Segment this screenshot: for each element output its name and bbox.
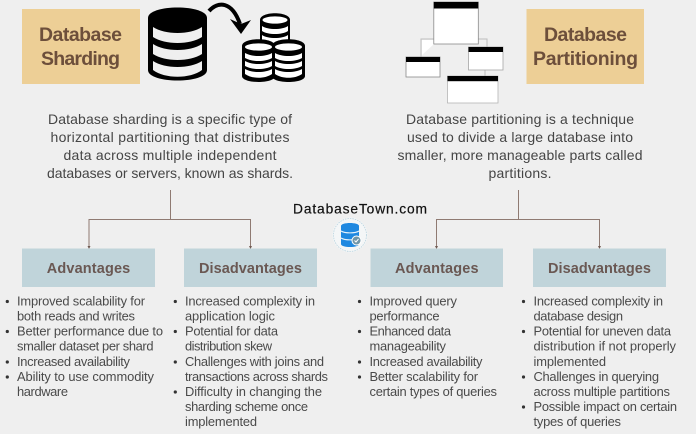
list: sharding disadvantages: [174, 294, 328, 429]
list: partitioning advantages: performance: [370, 308, 440, 324]
list: sharding advantages: both reads and writes: [17, 308, 135, 324]
heading: disadvantages: Disadvantages: [548, 261, 651, 277]
panel: partitioning disadvantages: [522, 248, 677, 429]
list: partitioning advantages: Better scalability for: [370, 369, 479, 384]
list: partitioning disadvantages: [522, 294, 677, 429]
text: sharding description: data across multiple independent: [64, 147, 277, 163]
brand: DatabaseTown.com: DatabaseTown.com: [293, 202, 427, 216]
text: partitioning description: Database partitioning is a technique: [406, 111, 634, 127]
list: sharding advantages: Better performance due to: [17, 324, 163, 338]
list: sharding disadvantages: Potential for data: [185, 324, 279, 338]
list: sharding advantages: [6, 294, 163, 399]
heading: advantages: Advantages: [47, 261, 130, 277]
heading: Database Sharding: [22, 9, 140, 84]
list: partitioning advantages: Enhanced data: [370, 324, 452, 338]
list: sharding disadvantages: Increased complexity in: [185, 294, 315, 308]
text: sharding description: [47, 111, 293, 181]
list: sharding disadvantages: implemented: [185, 414, 257, 429]
icon: brand database badge: [332, 218, 368, 252]
heading: advantages: [22, 248, 155, 287]
icon: partition windows: [406, 2, 503, 103]
text: sharding description: databases or servers, known as shards.: [47, 165, 293, 181]
text: partitioning description: smaller, more manageable parts called: [398, 147, 642, 163]
list: partitioning disadvantages: Possible impact on certain: [534, 399, 677, 414]
list: partitioning disadvantages: implemented: [534, 354, 606, 369]
heading: advantages: [370, 248, 503, 287]
list: sharding advantages: Ability to use commodity: [17, 369, 155, 384]
heading: Database Partitioning: Partitioning: [533, 48, 638, 70]
list: partitioning disadvantages: Challenges in querying: [534, 369, 659, 384]
list: sharding disadvantages: distribution skew: [185, 338, 273, 354]
text: sharding description: Database sharding is a specific type of: [48, 111, 292, 127]
text: sharding description: horizontal partitioning that distributes: [50, 129, 290, 145]
heading: Database Partitioning: [526, 9, 644, 84]
heading: Database Partitioning: Database: [544, 24, 627, 46]
heading: disadvantages: [184, 248, 317, 287]
icon: curved arrow: [209, 5, 251, 34]
list: partitioning disadvantages: types of queries: [534, 414, 621, 429]
connector: partitioning tree: [435, 190, 601, 249]
list: partitioning advantages: manageability: [370, 338, 447, 354]
list: partitioning disadvantages: distribution if not properly: [534, 338, 677, 354]
heading: disadvantages: [533, 248, 666, 287]
text: partitioning description: partitions.: [488, 165, 552, 181]
icon: large database: [148, 8, 207, 80]
list: partitioning disadvantages: database design: [534, 308, 623, 324]
list: sharding disadvantages: transactions across shards: [185, 369, 328, 384]
heading: Database Sharding: Sharding: [41, 48, 120, 70]
list: partitioning advantages: Improved query: [370, 294, 458, 308]
connector: sharding tree: [88, 190, 252, 249]
heading: advantages: Advantages: [395, 261, 479, 277]
panel: sharding advantages: [6, 248, 163, 399]
list: sharding advantages: hardware: [17, 384, 68, 399]
list: partitioning advantages: Increased availability: [370, 354, 483, 369]
list: sharding disadvantages: sharding scheme once: [185, 399, 308, 414]
heading: disadvantages: Disadvantages: [199, 261, 302, 277]
list: partitioning disadvantages: Potential for uneven data: [534, 324, 672, 338]
list: sharding advantages: Increased availability: [17, 354, 131, 369]
list: partitioning disadvantages: Increased complexity in: [534, 294, 663, 308]
panel: partitioning advantages: [358, 248, 503, 399]
text: partitioning description: [398, 111, 642, 181]
heading: Database Sharding: Database: [39, 24, 122, 46]
icon: small databases: [242, 13, 305, 82]
list: partitioning advantages: [358, 294, 497, 399]
list: partitioning advantages: certain types of queries: [370, 384, 497, 399]
list: sharding disadvantages: application logic: [185, 308, 276, 324]
list: partitioning disadvantages: across multiple partitions: [534, 384, 670, 399]
text: partitioning description: used to divide a large database into: [407, 129, 633, 145]
list: sharding disadvantages: Challenges with joins and: [185, 354, 324, 369]
list: sharding advantages: smaller dataset per shard: [17, 338, 154, 354]
list: sharding disadvantages: Difficulty in changing the: [185, 384, 322, 399]
list: sharding advantages: Improved scalability for: [17, 294, 146, 308]
panel: sharding disadvantages: [174, 248, 328, 429]
